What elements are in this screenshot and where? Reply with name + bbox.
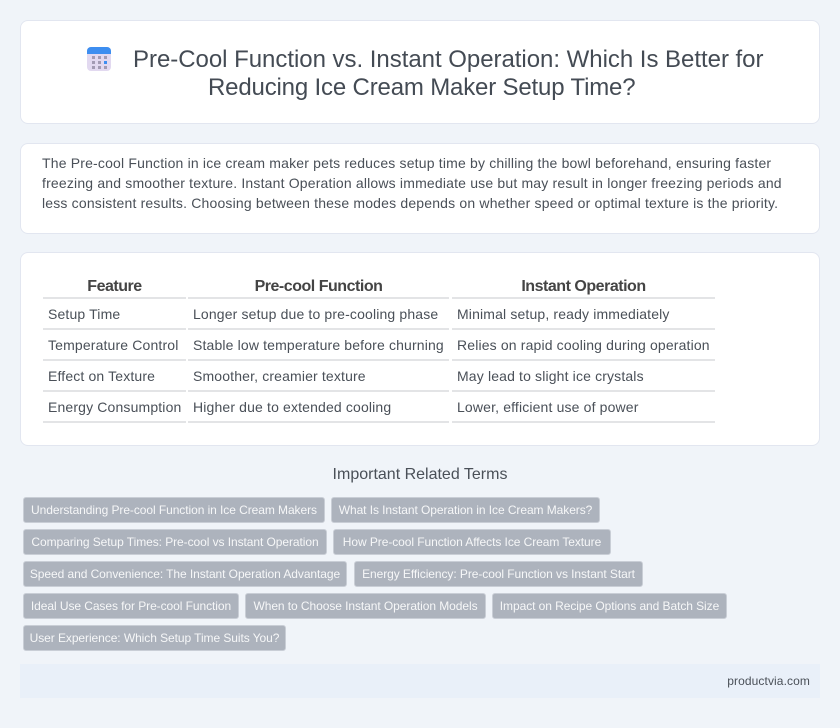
intro panel <box>20 143 820 234</box>
header card <box>20 20 820 124</box>
comparison table: Higher due to extended cooling <box>193 399 391 415</box>
related term tags: Impact on Recipe Options and Batch Size <box>500 599 719 613</box>
comparison table: Longer setup due to pre-cooling phase <box>193 306 438 322</box>
comparison table: Pre-cool Function <box>255 278 382 295</box>
related term tags: User Experience: Which Setup Time Suits You? <box>30 631 279 645</box>
related term tags: Comparing Setup Times: Pre-cool vs Instant Operation <box>31 535 319 549</box>
related term tags: What Is Instant Operation in Ice Cream Makers? <box>339 503 592 517</box>
comparison table: Stable low temperature before churning <box>193 337 444 353</box>
comparison table: Minimal setup, ready immediately <box>457 306 670 322</box>
comparison table <box>43 278 715 423</box>
intro text: The Pre-cool Function in ice cream maker pets reduces setup time by chilling the bowl beforehand, ensuring faster <box>42 155 771 171</box>
related term tags <box>23 497 727 651</box>
related terms heading: Important Related Terms <box>333 466 507 483</box>
comparison table: Temperature Control <box>48 337 178 353</box>
related term tags: How Pre-cool Function Affects Ice Cream Texture <box>343 535 601 549</box>
intro text: freezing and smoother texture. Instant Operation allows immediate use but may result in longer freezing periods and <box>42 175 782 191</box>
footer bar <box>20 664 820 698</box>
related term tags: Ideal Use Cases for Pre-cool Function <box>31 599 231 613</box>
comparison table: Instant Operation <box>521 278 646 295</box>
related term tags: Energy Efficiency: Pre-cool Function vs Instant Start <box>362 567 635 581</box>
title <box>133 46 764 101</box>
comparison table: Feature <box>87 278 142 295</box>
footer source: productvia.com <box>727 674 810 688</box>
related term tags: Understanding Pre-cool Function in Ice Cream Makers <box>31 503 317 517</box>
comparison table: Smoother, creamier texture <box>193 368 366 384</box>
related term tags: When to Choose Instant Operation Models <box>253 599 478 613</box>
intro text <box>42 155 782 211</box>
comparison table: Lower, efficient use of power <box>457 399 639 415</box>
comparison table: Effect on Texture <box>48 368 155 384</box>
title: Pre-Cool Function vs. Instant Operation: Which Is Better for <box>133 46 763 73</box>
comparison table: Setup Time <box>48 306 120 322</box>
comparison table: May lead to slight ice crystals <box>457 368 644 384</box>
table panel <box>20 252 820 446</box>
comparison table: Relies on rapid cooling during operation <box>457 337 710 353</box>
intro text: less consistent results. Choosing between these modes depends on whether speed or optimal texture is the priority. <box>42 195 778 211</box>
related term tags: Speed and Convenience: The Instant Operation Advantage <box>30 567 340 581</box>
icon: calendar <box>87 47 111 71</box>
title: Reducing Ice Cream Maker Setup Time? <box>208 74 635 101</box>
comparison table: Energy Consumption <box>48 399 181 415</box>
